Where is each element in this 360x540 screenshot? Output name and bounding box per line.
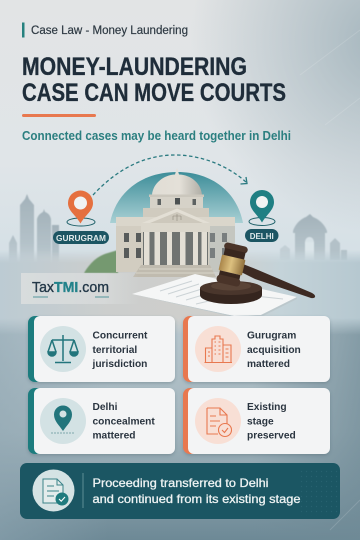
wings xyxy=(116,217,235,272)
text: territorial xyxy=(92,345,137,356)
title: CASE CAN MOVE COURTS xyxy=(22,79,286,107)
text xyxy=(247,330,301,370)
text: Existing xyxy=(247,402,287,413)
skyline: left xyxy=(9,194,59,264)
text xyxy=(92,402,155,442)
text: Gurugram xyxy=(247,330,296,342)
text xyxy=(92,330,148,370)
pin: Gurugram xyxy=(67,190,95,226)
text: acquisition xyxy=(247,345,301,356)
label: Delhi xyxy=(245,229,278,242)
portico xyxy=(143,232,208,265)
text: jurisdiction xyxy=(92,359,147,370)
head xyxy=(216,242,248,287)
card: existing stage xyxy=(183,388,330,454)
document xyxy=(132,274,297,317)
subtitle: Connected cases may be heard together in Delhi xyxy=(22,129,291,143)
label: Gurugram: GURUGRAM xyxy=(56,233,106,243)
courthouse xyxy=(84,168,243,277)
logo: TaxTMI.com: TaxTMI.com xyxy=(32,279,109,296)
skyline: India Gate xyxy=(280,214,347,260)
gavel xyxy=(200,242,315,304)
banner text: Proceeding transferred to Delhi xyxy=(92,476,268,490)
card: Gurugram acquisition xyxy=(183,316,330,382)
sound block xyxy=(200,286,262,304)
banner text: and continued from its existing stage xyxy=(92,492,301,506)
text: mattered xyxy=(247,359,290,370)
text xyxy=(247,402,296,442)
icon: scales xyxy=(48,335,78,362)
ground xyxy=(0,250,360,335)
header kicker: Case Law - Money Laundering xyxy=(31,25,188,37)
text: preserved xyxy=(247,430,296,442)
title underline xyxy=(22,114,96,117)
foliage xyxy=(84,250,118,273)
steps xyxy=(133,265,216,277)
banner text xyxy=(92,476,301,506)
title xyxy=(22,53,286,107)
dashed arc arrow xyxy=(93,155,247,195)
pediment xyxy=(142,208,210,226)
label: Delhi: DELHI xyxy=(250,231,274,241)
text: mattered xyxy=(92,430,136,442)
text: Concurrent xyxy=(92,330,148,342)
teal dome backdrop xyxy=(110,172,243,223)
icon: document check xyxy=(207,408,232,436)
card: Delhi concealment xyxy=(28,388,175,454)
icon: pin xyxy=(51,406,75,433)
handle xyxy=(241,264,315,298)
text: Delhi xyxy=(92,402,118,413)
dome xyxy=(143,168,209,223)
logo: TaxTMI.com xyxy=(21,273,139,304)
pin: Delhi xyxy=(249,190,275,226)
title: MONEY-LAUNDERING xyxy=(22,53,247,81)
banner: outcome xyxy=(20,463,340,519)
icon: buildings xyxy=(204,336,232,362)
card: concurrent jurisdiction xyxy=(28,316,175,382)
icon: document check xyxy=(43,479,68,506)
text: stage xyxy=(247,416,274,428)
text: concealment xyxy=(92,416,155,428)
